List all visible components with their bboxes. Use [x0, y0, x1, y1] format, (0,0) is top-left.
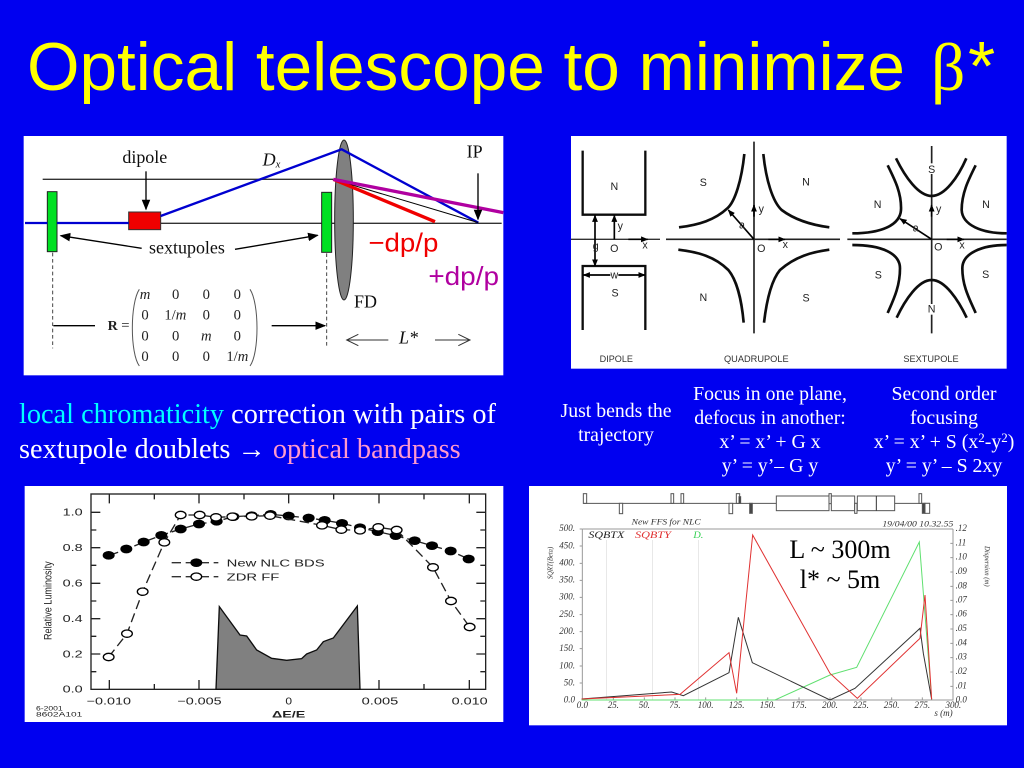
plot legend: SQBTX — [588, 531, 625, 541]
plot axis numbers: .11 — [956, 537, 966, 547]
plot axis numbers: SQRT(Beta) — [545, 546, 554, 579]
dipole diagram — [571, 151, 660, 330]
transfer matrix: 0 — [234, 287, 241, 303]
chart axis labels: 6-2001 — [36, 705, 63, 712]
plot axis numbers: 125. — [729, 700, 745, 710]
plot axis numbers: .03 — [956, 652, 967, 662]
plot axis numbers: 500. — [559, 523, 575, 533]
text: sextupole description: y’ = y’ – S 2xy — [886, 455, 1002, 477]
plot axis numbers: 0.0 — [956, 694, 967, 704]
plot axis numbers: 300. — [558, 592, 575, 602]
transfer matrix: 0 — [203, 308, 210, 324]
plot axis numbers: .05 — [956, 623, 967, 633]
plot axis numbers: 175. — [791, 700, 807, 710]
text: sextupole description: 2 — [1001, 430, 1008, 445]
text: dipole description: Just bends the — [560, 400, 672, 422]
chart axis labels: Relative Luminosity — [43, 561, 55, 640]
sextupole diagram: x — [959, 239, 965, 251]
dp/p labels: −dp/p — [368, 228, 438, 258]
transfer matrix — [108, 287, 257, 366]
chart axes — [91, 494, 486, 689]
quadrupole diagram: O — [757, 243, 765, 255]
plot axis numbers: .04 — [956, 637, 967, 647]
dp/p labels — [368, 228, 499, 291]
plot legend: SQBTY — [635, 531, 673, 541]
plot axis numbers: Dispersion (m) — [983, 545, 992, 587]
magnet captions: QUADRUPOLE — [724, 354, 789, 364]
labels: FD — [354, 292, 377, 312]
labels — [122, 142, 483, 347]
SQBTY curve — [582, 535, 932, 699]
chart axis labels: 0.005 — [362, 696, 399, 707]
sextupole diagram: N — [928, 304, 936, 316]
plot axes — [580, 529, 953, 700]
title: Optical telescope to minimize — [27, 30, 905, 105]
plot axis numbers: .06 — [956, 609, 967, 619]
transfer matrix: m — [201, 328, 212, 344]
chart axis labels: 0 — [285, 696, 293, 707]
chart legend — [172, 558, 325, 584]
dipole magnet — [129, 212, 161, 230]
text: quadrupole description: defocus in another: — [694, 407, 846, 429]
text: quadrupole description: Focus in one plane, — [693, 383, 847, 405]
sextupole right — [322, 192, 332, 252]
plot axis numbers: .02 — [956, 666, 967, 676]
transfer matrix: 0 — [234, 328, 241, 344]
transfer matrix: 0 — [141, 328, 149, 344]
chart legend: ZDR FF — [227, 573, 279, 584]
arrows — [53, 171, 478, 326]
chart axis labels: 0.4 — [63, 614, 83, 625]
plot axis numbers: 250. — [884, 700, 900, 710]
plot axis numbers: .07 — [956, 594, 967, 604]
plot axis numbers: 150. — [760, 700, 776, 710]
plot axis numbers: 100. — [559, 660, 575, 670]
beam axis lines — [25, 179, 502, 223]
text: quadrupole description: y’ = y’– G y — [722, 455, 818, 477]
dipole diagram: w — [609, 269, 618, 281]
chart axis labels: 1.0 — [63, 508, 83, 519]
transfer matrix: 0 — [203, 349, 210, 365]
sextupole diagram: S — [928, 164, 935, 176]
panel: relative luminosity chart — [25, 486, 503, 722]
transfer matrix: 0 — [203, 287, 210, 303]
magnet captions: SEXTUPOLE — [903, 354, 959, 364]
labels: L* — [398, 327, 418, 347]
quadrupole diagram: y — [759, 203, 765, 215]
plot axis numbers: 150. — [559, 643, 575, 653]
plot axis numbers: 350. — [558, 575, 575, 585]
chart legend: New NLC BDS — [227, 559, 325, 570]
sextupole left — [47, 192, 57, 252]
text: sextupole description: ) — [1008, 431, 1014, 453]
plot axis numbers: 0.0 — [564, 694, 576, 704]
magnet captions — [600, 354, 959, 364]
plot legend — [588, 531, 703, 541]
sextupole diagram: y — [936, 203, 942, 215]
labels: sextupoles — [149, 237, 225, 257]
plot header: 19/04/00 10.32.55 — [882, 520, 953, 529]
labels: dipole — [122, 147, 167, 167]
dipole diagram: y — [618, 220, 624, 232]
plot axis numbers: 200. — [559, 626, 575, 636]
text: sextupole description: x’ = x’ + S (x — [874, 430, 1014, 453]
sextupole diagram: N — [982, 199, 990, 211]
panel: optical telescope schematic — [24, 136, 503, 375]
SQBTX curve — [582, 617, 932, 700]
dashed sextupole markers — [53, 253, 327, 348]
plot axis numbers: 400. — [559, 558, 575, 568]
New NLC BDS curve — [103, 510, 475, 563]
dipole diagram: O — [610, 243, 618, 255]
L* span arrows — [347, 334, 470, 346]
dipole diagram: x — [642, 240, 648, 252]
annotation: L and l* values: l* ~ 5m — [800, 565, 880, 594]
plot axis numbers: 25. — [608, 700, 619, 710]
sextupole diagram: S — [875, 270, 882, 282]
transfer matrix: R — [108, 319, 119, 334]
plot legend: D. — [692, 531, 703, 541]
transfer matrix: m — [140, 287, 150, 303]
chart axis labels: ΔE/E — [272, 709, 305, 719]
plot axis numbers: 275. — [914, 700, 930, 710]
blue beam trajectory — [25, 149, 478, 223]
sextupole diagram: N — [874, 199, 882, 211]
magnet captions: DIPOLE — [600, 354, 633, 364]
plot axis numbers: 250. — [559, 609, 575, 619]
plot axis numbers: 300. — [944, 700, 961, 710]
transfer matrix: 0 — [234, 308, 241, 324]
quadrupole diagram: x — [783, 239, 789, 251]
plot axis numbers: .12 — [956, 523, 967, 533]
rays: nominal, minus and plus dp/p — [333, 179, 503, 223]
plot axis numbers: s (m) — [934, 708, 953, 718]
transfer matrix: 0 — [141, 308, 149, 324]
plot axis numbers: 0.0 — [577, 700, 588, 710]
plot axis numbers: 225. — [853, 700, 869, 710]
plot header: New FFS for NLC — [630, 517, 701, 526]
transfer matrix: 0 — [141, 349, 149, 365]
energy distribution histogram — [216, 606, 360, 689]
text: sextupole description: Second order — [892, 383, 997, 405]
transfer matrix: = — [121, 318, 129, 334]
labels: x — [275, 160, 281, 171]
quadrupole diagram: S — [802, 292, 810, 304]
title: β — [931, 30, 965, 105]
plot axis numbers: .10 — [956, 552, 967, 562]
final doublet lens — [335, 140, 353, 300]
quadrupole diagram: N — [699, 292, 707, 304]
plot axis numbers: 100. — [698, 700, 714, 710]
text: quadrupole description: x’ = x’ + G x — [719, 431, 821, 453]
transfer matrix: 1/m — [226, 349, 248, 365]
chart axis labels: 0.6 — [63, 579, 83, 590]
text: chromaticity correction: sextupole doublets → — [19, 434, 273, 465]
labels: D — [263, 150, 276, 170]
title: * — [968, 27, 995, 105]
plot header — [630, 517, 953, 529]
plot axis numbers: 200. — [822, 700, 838, 710]
chart axis labels: 8602A101 — [36, 711, 83, 718]
text: chromaticity correction: local chromaticity — [19, 399, 225, 430]
dipole diagram: g — [593, 240, 599, 252]
plot axis numbers: .01 — [956, 680, 967, 690]
text: chromaticity correction: optical bandpass — [273, 434, 461, 465]
quadrupole diagram: a — [739, 219, 745, 231]
dipole diagram: N — [610, 181, 618, 193]
text: sextupole description: 2 — [978, 430, 985, 445]
chart axis labels: 0.2 — [63, 649, 83, 660]
sextupole diagram: a — [913, 223, 919, 235]
transfer matrix: 0 — [172, 349, 179, 365]
dipole diagram: S — [611, 288, 619, 300]
dp/p labels: +dp/p — [428, 261, 499, 291]
plot axis numbers: .09 — [956, 566, 967, 576]
quadrupole diagram: N — [802, 177, 810, 189]
plot axis numbers — [545, 523, 992, 718]
quadrupole diagram: S — [700, 177, 707, 189]
annotation: L and l* values: L ~ 300m — [789, 535, 891, 564]
sextupole diagram: S — [982, 269, 989, 281]
transfer matrix: 1/m — [164, 308, 186, 324]
plot axis numbers: 450. — [559, 540, 575, 550]
chart axis labels — [36, 508, 488, 719]
chart axis labels: 0.8 — [63, 543, 83, 554]
transfer matrix: 0 — [172, 287, 179, 303]
plot axis numbers: 50. — [639, 700, 650, 710]
plot axis numbers: 50. — [564, 678, 575, 688]
chart axis labels: −0.010 — [87, 696, 132, 707]
quadrupole diagram — [666, 142, 840, 333]
transfer matrix: 0 — [172, 328, 179, 344]
plot axis numbers: 75. — [669, 700, 681, 710]
labels: IP — [467, 142, 483, 162]
panel: FFS optics plot — [529, 486, 1007, 725]
sextupole diagram: O — [934, 242, 942, 254]
ZDR FF curve — [103, 511, 475, 661]
plot axis numbers: .08 — [956, 580, 967, 590]
dispersion curve — [582, 542, 932, 700]
chart axis labels: 0.0 — [63, 685, 83, 696]
text: chromaticity correction: correction with pairs of — [224, 399, 497, 430]
text: sextupole description: focusing — [910, 407, 978, 429]
panel: magnet pole diagrams — [571, 136, 1007, 369]
beamline lattice — [583, 494, 930, 514]
text: sextupole description: -y — [985, 431, 1001, 453]
chart axis labels: 0.010 — [452, 696, 488, 707]
text: dipole description: trajectory — [578, 424, 654, 446]
chart axis labels: −0.005 — [177, 696, 222, 707]
sextupole diagram — [847, 146, 1007, 333]
